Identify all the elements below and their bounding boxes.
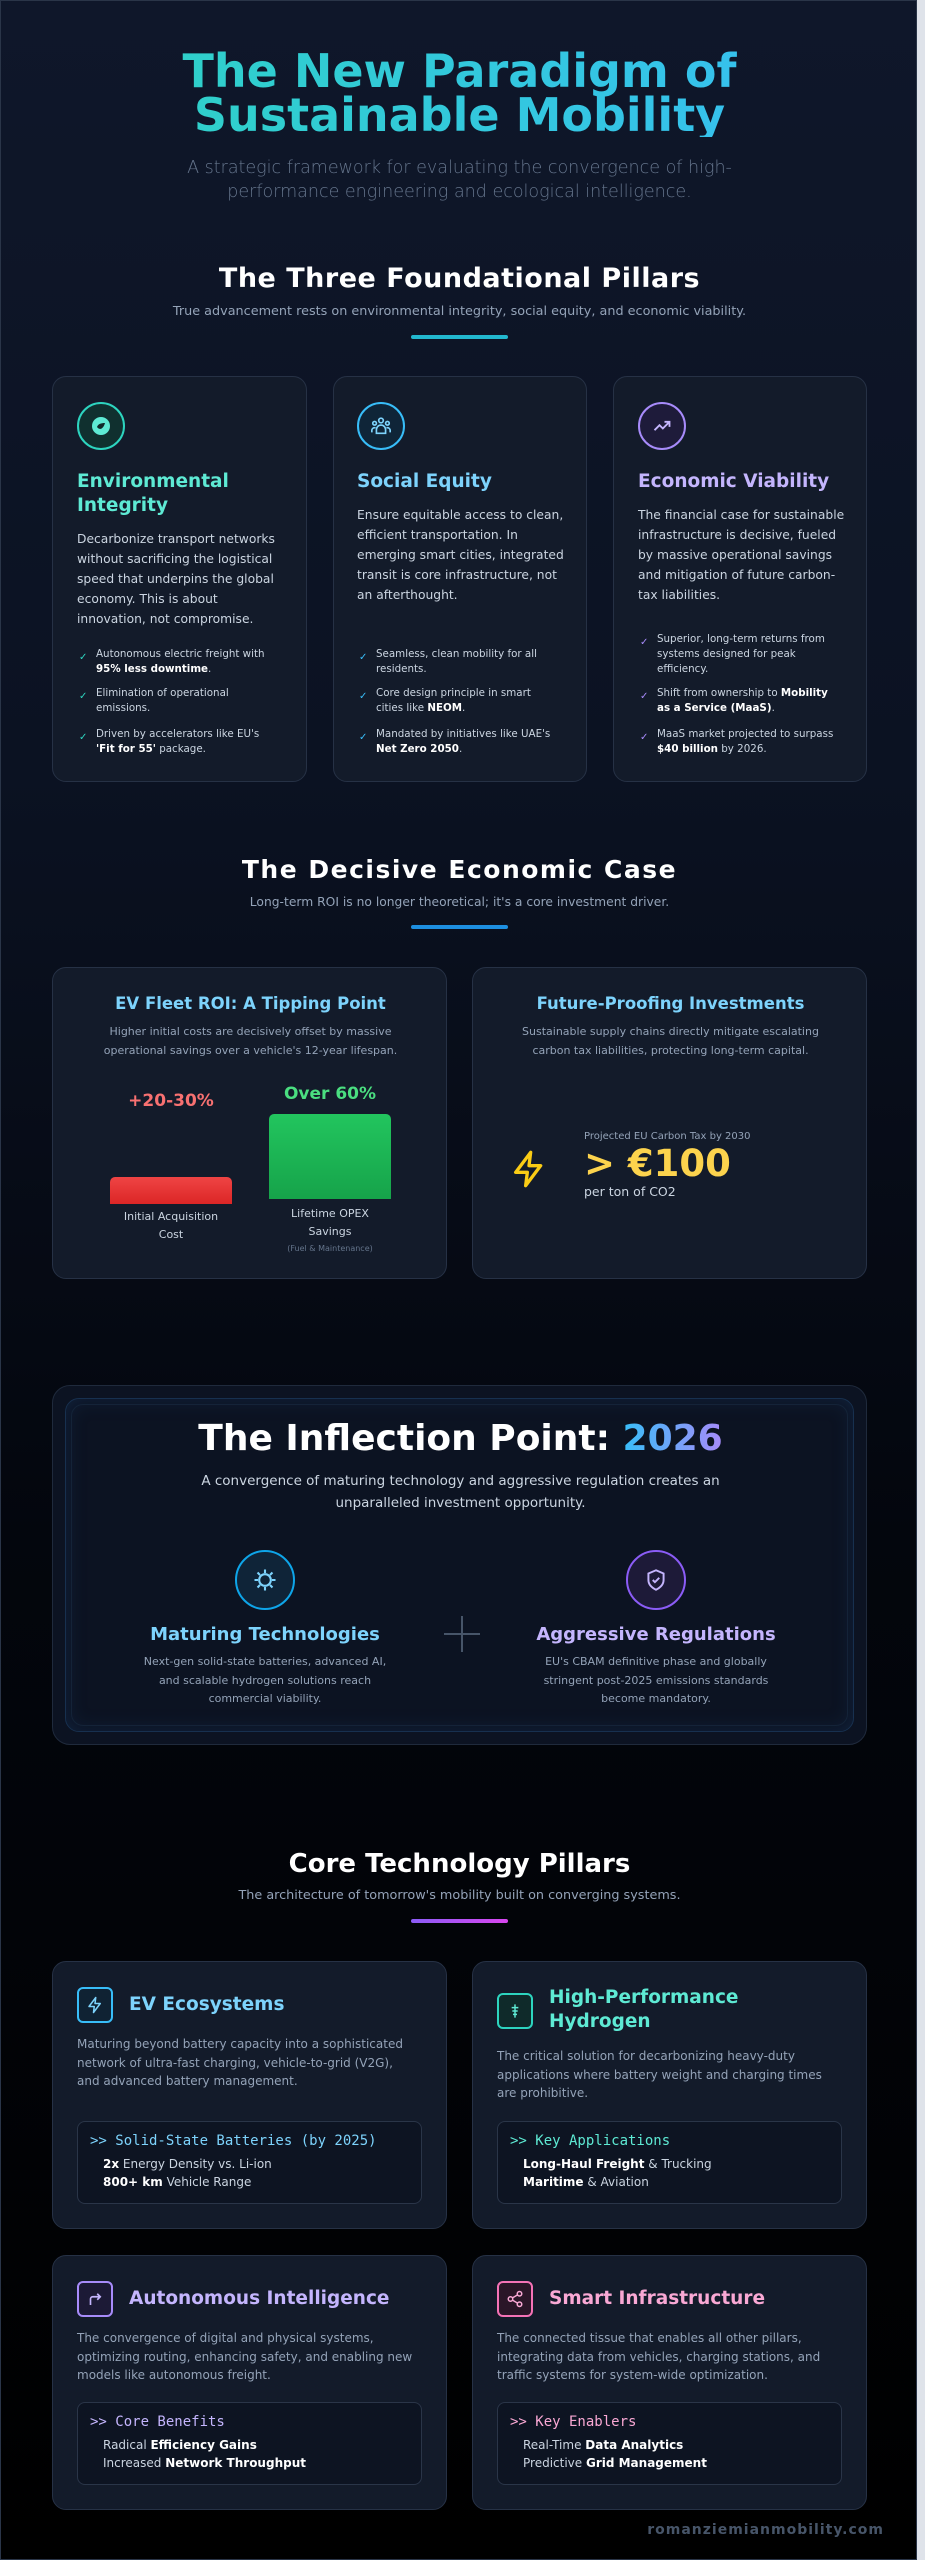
- code box: >> Key Applications: [510, 2133, 670, 2149]
- panel: environmental integrity: ✓: [79, 691, 87, 702]
- block: aggressive regulations: Aggressive Regulations: [536, 1624, 776, 1645]
- code box: Predictive Grid Management: [523, 2456, 707, 2470]
- block: maturing technologies: commercial viability.: [209, 1692, 321, 1705]
- panel: social equity: ✓: [359, 691, 367, 702]
- icon: hydrogen: [497, 1993, 533, 2029]
- bullets: ✓: [79, 652, 87, 663]
- heading: High-Performance: [549, 1987, 738, 2008]
- subtitle: [187, 158, 732, 202]
- icon: bolt: [77, 1987, 113, 2023]
- code box: [77, 2121, 422, 2204]
- heading: Autonomous Intelligence: [129, 2288, 389, 2309]
- text: operational savings over a vehicle's 12-year lifespan.: [104, 1044, 397, 1057]
- panel: autonomous intelligence: [52, 2255, 447, 2510]
- icon: shield: [626, 1550, 686, 1610]
- text: [522, 1025, 819, 1057]
- block: aggressive regulations: EU's CBAM definitive phase and globally: [545, 1655, 767, 1668]
- block: aggressive regulations: become mandatory.: [601, 1692, 711, 1705]
- heading: three pillars: The Three Foundational Pillars: [219, 263, 700, 294]
- text: A convergence of maturing technology and aggressive regulation creates an: [201, 1473, 720, 1489]
- heading: Economic Viability: [638, 471, 829, 492]
- panel: smart infrastructure: [472, 2255, 867, 2510]
- code box: 2x Energy Density vs. Li-ion: [103, 2157, 272, 2171]
- heading: core technology: Core Technology Pillars: [289, 1849, 630, 1879]
- text: Maturing beyond battery capacity into a sophisticated network of ultra-fast charging, vehicle-to-grid (V2G), and advanced battery management.: [77, 2037, 403, 2088]
- heading: EV Ecosystems: [129, 1994, 284, 2015]
- bar: OPEX savings: Lifetime OPEX: [291, 1207, 369, 1220]
- text: The financial case for sustainable infrastructure is decisive, fueled by massive operational savings and mitigation of future carbon-tax liabilities.: [638, 508, 844, 602]
- text: The convergence of digital and physical systems, optimizing routing, enhancing safety, and enabling new models like autonomous freight.: [77, 2331, 412, 2382]
- subtitle: A strategic framework for evaluating the convergence of high-: [187, 158, 732, 178]
- bar: OPEX savings: [269, 1084, 391, 1253]
- block: aggressive regulations: [536, 1550, 776, 1705]
- heading: Future-Proofing Investments: [537, 994, 804, 1013]
- block: maturing technologies: Next-gen solid-state batteries, advanced AI,: [144, 1655, 386, 1668]
- stat: carbon tax: per ton of CO2: [584, 1184, 676, 1199]
- text: Higher initial costs are decisively offset by massive: [110, 1025, 392, 1038]
- code box: Increased Network Throughput: [103, 2456, 306, 2470]
- bar: initial cost: Initial Acquisition: [124, 1210, 218, 1223]
- bar: OPEX savings: Over 60%: [284, 1084, 376, 1104]
- code box: >> Solid-State Batteries (by 2025): [90, 2133, 377, 2149]
- code box: [77, 2402, 422, 2485]
- heading: Smart Infrastructure: [549, 2288, 765, 2309]
- text: [104, 1025, 397, 1057]
- icon: chip: [235, 1550, 295, 1610]
- text: The connected tissue that enables all other pillars, integrating data from vehicles, charging stations, and traffic systems for system-wide optimization.: [497, 2331, 820, 2382]
- bar: initial cost: [110, 1091, 232, 1241]
- icon: route: [77, 2281, 113, 2317]
- code box: Long-Haul Freight & Trucking: [523, 2157, 712, 2171]
- stat: carbon tax: Projected EU Carbon Tax by 2030: [584, 1131, 750, 1142]
- code box: [497, 2121, 842, 2204]
- panel: inflection point: [52, 1385, 867, 1745]
- panel: hydrogen: [472, 1961, 867, 2229]
- bullets: ✓: [640, 637, 648, 648]
- panel: environmental integrity: Driven by accelerators like EU's 'Fit for 55' package.: [96, 728, 259, 755]
- text: Sustainable supply chains directly mitigate escalating: [522, 1025, 819, 1038]
- heading: economic case: The Decisive Economic Case: [242, 855, 677, 884]
- panel: economic viability: ✓: [640, 732, 648, 743]
- heading: [77, 471, 229, 516]
- footer: romanziemianmobility.com: [647, 2522, 884, 2538]
- panel: environmental integrity: [52, 376, 307, 782]
- heading: Integrity: [77, 495, 168, 516]
- title: [1, 49, 918, 137]
- icon: bolt: [514, 1150, 542, 1188]
- heading: EV Fleet ROI: A Tipping Point: [115, 994, 386, 1013]
- bullets: ✓: [359, 652, 367, 663]
- panel: future-proofing: [472, 967, 867, 1279]
- heading: Social Equity: [357, 471, 492, 492]
- text: Decarbonize transport networks without sacrificing the logistical speed that underpins the global economy. This is about innovation, not compromise.: [77, 532, 275, 626]
- block: maturing technologies: and scalable hydrogen solutions reach: [159, 1674, 371, 1686]
- heading: The Inflection Point: 2026: [198, 1418, 723, 1459]
- heading: Hydrogen: [549, 2011, 651, 2032]
- bar: OPEX savings: Savings: [308, 1225, 351, 1238]
- bullets: Autonomous electric freight with 95% less downtime.: [96, 648, 265, 675]
- title: The New Paradigm of: [182, 44, 736, 98]
- text: Ensure equitable access to clean, efficient transportation. In emerging smart cities, integrated transit is core infrastructure, not an afterthought.: [357, 508, 564, 602]
- block: maturing technologies: [144, 1550, 386, 1705]
- subtitle: performance engineering and ecological intelligence.: [227, 182, 692, 202]
- stat: carbon tax: [584, 1131, 750, 1199]
- bar: OPEX savings: (Fuel & Maintenance): [287, 1244, 373, 1253]
- text: unparalleled investment opportunity.: [335, 1495, 586, 1511]
- stat: carbon tax: > €100: [584, 1142, 731, 1185]
- bullets: Seamless, clean mobility for all residents.: [376, 648, 537, 675]
- code box: >> Key Enablers: [510, 2414, 636, 2430]
- text: carbon tax liabilities, protecting long-term capital.: [532, 1044, 809, 1057]
- block: aggressive regulations: stringent post-2025 emissions standards: [544, 1674, 768, 1686]
- panel: social equity: Mandated by initiatives like UAE's Net Zero 2050.: [376, 728, 550, 755]
- block: maturing technologies: Maturing Technologies: [150, 1624, 380, 1645]
- subheading: economic case: Long-term ROI is no longer theoretical; it's a core investment driver.: [250, 895, 669, 909]
- code box: [497, 2402, 842, 2485]
- title: Sustainable Mobility: [194, 88, 725, 142]
- code box: Real-Time Data Analytics: [523, 2438, 683, 2452]
- text: [201, 1473, 720, 1511]
- code box: Radical Efficiency Gains: [103, 2438, 257, 2452]
- bar: initial cost: +20-30%: [128, 1091, 214, 1111]
- code box: >> Core Benefits: [90, 2414, 225, 2430]
- heading: Environmental: [77, 471, 229, 492]
- heading: [549, 1987, 738, 2032]
- panel: economic viability: Shift from ownership to Mobility as a Service (MaaS).: [657, 687, 828, 714]
- panel: economic viability: MaaS market projected to surpass $40 billion by 2026.: [657, 728, 833, 755]
- panel: social equity: [333, 376, 587, 782]
- subheading: core technology: The architecture of tomorrow's mobility built on converging systems.: [238, 1888, 681, 1903]
- code box: 800+ km Vehicle Range: [103, 2175, 251, 2189]
- icon: people: [357, 402, 405, 450]
- icon: share: [497, 2281, 533, 2317]
- panel: environmental integrity: Elimination of operational emissions.: [96, 687, 229, 714]
- code box: Maritime & Aviation: [523, 2175, 649, 2189]
- bullets: Superior, long-term returns from systems designed for peak efficiency.: [657, 633, 825, 675]
- panel: social equity: Core design principle in smart cities like NEOM.: [376, 687, 531, 714]
- subheading: three pillars: True advancement rests on environmental integrity, social equity, and economic viability.: [173, 304, 746, 319]
- panel: social equity: ✓: [359, 732, 367, 743]
- icon: trend: [638, 402, 686, 450]
- panel: economic viability: [613, 376, 867, 782]
- panel: environmental integrity: ✓: [79, 732, 87, 743]
- panel: EV ecosystems: [52, 1961, 447, 2229]
- icon: leaf: [77, 402, 125, 450]
- text: The critical solution for decarbonizing heavy-duty applications where battery weight and charging times are prohibitive.: [497, 2049, 822, 2100]
- icon: plus: [444, 1616, 480, 1652]
- panel: EV fleet ROI: Cost: [159, 1228, 183, 1241]
- panel: economic viability: ✓: [640, 691, 648, 702]
- panel: EV fleet ROI: [52, 967, 447, 1279]
